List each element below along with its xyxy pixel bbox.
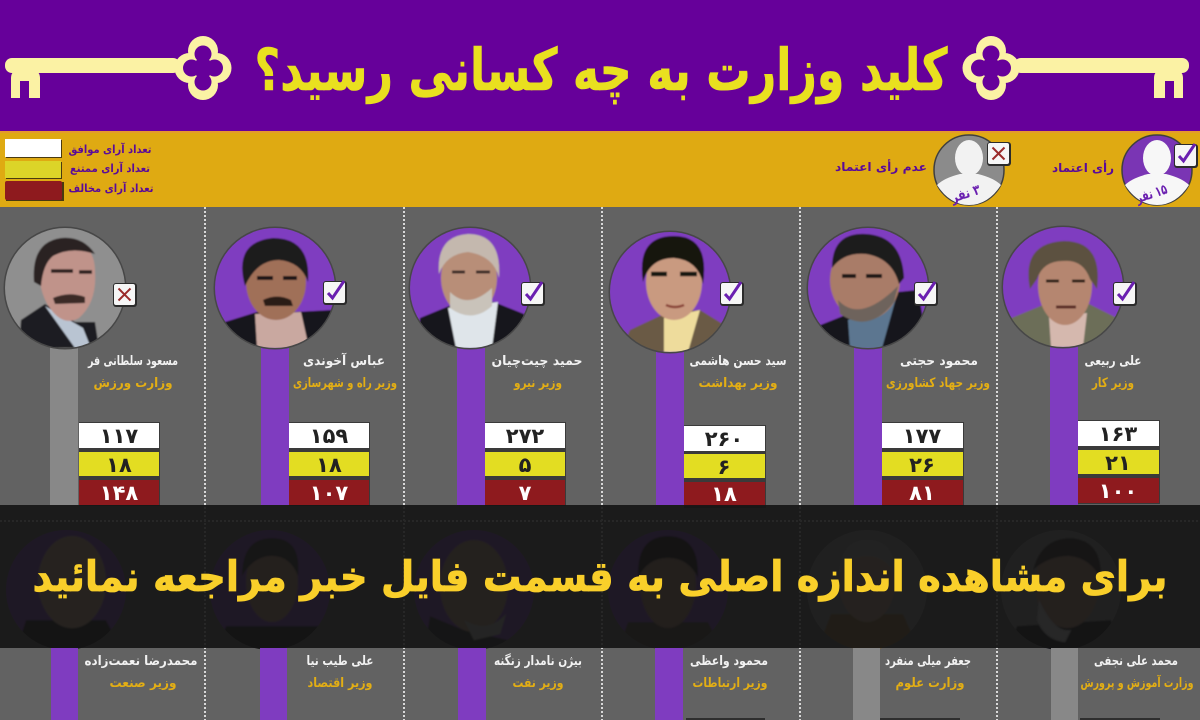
bar — [854, 348, 882, 505]
name: محمود حجتی — [900, 354, 978, 369]
header band — [0, 0, 1200, 131]
status: approved — [323, 281, 347, 305]
votes: ۱۸ — [106, 453, 132, 477]
votes: ۱۸ — [711, 482, 737, 506]
ministry: وزیر راه و شهرسازی — [293, 376, 397, 391]
votes: ۱۸ — [316, 453, 342, 477]
portrait: Bijan Zanganeh — [413, 529, 535, 651]
icon: right key — [962, 36, 1189, 100]
legend: vote colours — [5, 139, 154, 201]
bar — [656, 350, 684, 505]
card: Mahmoud Hojjati — [806, 226, 990, 506]
legend: no confidence, 3 people: عدم رأی اعتماد — [835, 159, 927, 175]
votes — [1078, 420, 1160, 504]
legend: vote colours: تعداد آرای موافق — [68, 142, 152, 156]
votes: ۱۰۷ — [310, 481, 348, 505]
ministry: وزیر نیرو — [513, 376, 562, 391]
bar — [50, 345, 78, 505]
status: approved — [914, 282, 938, 306]
votes — [485, 422, 566, 506]
legend: no confidence, 3 people — [835, 135, 1011, 207]
status: approved — [521, 282, 545, 306]
portrait — [408, 226, 532, 350]
name: سید حسن هاشمی — [690, 354, 786, 369]
portrait: Mahmoud Vaezi — [607, 529, 729, 651]
card text: Tayebnia: علی طیب نیا — [306, 654, 374, 669]
card text: Najafi: محمد علی نجفی — [1094, 654, 1178, 669]
column separators — [205, 207, 997, 720]
legend: no confidence, 3 people: ۳ نفر — [948, 182, 983, 207]
votes: ۲۶۰ — [705, 427, 743, 451]
portrait — [608, 230, 732, 354]
votes: ۵ — [519, 453, 532, 477]
votes: ۱۱۷ — [100, 424, 138, 448]
name: مسعود سلطانی فر — [87, 354, 178, 369]
votes: ۱۶۳ — [1099, 422, 1137, 446]
legend: vote colours: تعداد آرای مخالف — [68, 181, 154, 195]
portrait: Mohammad Ali Najafi — [1036, 558, 1098, 650]
votes: ۲۷۲ — [506, 424, 544, 448]
portrait: Mohammad Reza Nematzadeh — [5, 529, 127, 651]
bottom row bars — [51, 648, 1078, 720]
votes: ۶ — [718, 455, 730, 479]
votes: ۸۱ — [909, 481, 935, 505]
bar — [261, 348, 289, 505]
row divider — [0, 520, 1200, 522]
name: علی ربیعی — [1084, 354, 1142, 369]
card text: Tayebnia: وزیر اقتصاد — [308, 676, 372, 691]
votes: ۱۵۹ — [310, 424, 348, 448]
portrait: Ali Tayebnia — [209, 529, 331, 651]
bar — [1050, 345, 1078, 505]
name: عباس آخوندی — [303, 352, 385, 369]
portrait — [1002, 226, 1124, 348]
ministry: وزیر جهاد کشاورزی — [886, 376, 990, 391]
legend: vote colours: تعداد آرای ممتنع — [70, 161, 150, 175]
portrait: Jafar Milimonfared — [840, 556, 894, 648]
votes: ۱۴۸ — [100, 481, 138, 505]
legend: vote of confidence, 15 people: ۱۵ نفر — [1133, 182, 1170, 207]
portrait — [806, 226, 930, 350]
card text: Zanganeh: بیژن نامدار زنگنه — [494, 653, 582, 669]
status: approved — [1113, 282, 1137, 306]
icon: left key — [5, 36, 232, 100]
card text: Nematzadeh: محمدرضا نعمت‌زاده — [84, 654, 198, 669]
name: حمید چیت‌چیان — [492, 354, 582, 369]
vote box tops at bottom edge — [686, 718, 1160, 720]
card text: Zanganeh — [494, 653, 582, 691]
card text: Milimonfared — [885, 654, 971, 691]
votes: ۲۶ — [909, 453, 935, 477]
card text: Vaezi: محمود واعظی — [690, 654, 768, 669]
votes — [79, 422, 160, 506]
card text: Vaezi — [690, 654, 768, 691]
card text: Tayebnia — [306, 654, 374, 691]
legend band — [0, 131, 1200, 207]
legend: vote of confidence, 15 people — [1052, 135, 1198, 207]
ministry: وزیر کار — [1091, 376, 1134, 391]
card: Masoud Soltanifar — [4, 226, 178, 506]
status: approved — [720, 282, 744, 306]
votes: ۲۱ — [1105, 451, 1131, 475]
ministry: وزارت ورزش — [94, 376, 172, 391]
legend: vote of confidence, 15 people: رأی اعتماد — [1052, 160, 1114, 175]
card: Seyed Hassan Hashemi — [608, 230, 786, 508]
status: rejected — [113, 283, 137, 307]
card text: Milimonfared: جعفر میلی منفرد — [885, 654, 971, 669]
card: Abbas Akhoundi — [214, 226, 397, 506]
votes — [289, 422, 370, 506]
card: Ali Rabiei — [1002, 226, 1160, 505]
card text: Nematzadeh: وزیر صنعت — [110, 676, 176, 691]
votes: ۷ — [519, 481, 532, 505]
bar — [457, 348, 485, 505]
bottom row names and ministries — [84, 653, 1194, 691]
votes — [882, 422, 964, 506]
card text: Vaezi: وزیر ارتباطات — [692, 676, 768, 691]
card text: Zanganeh: وزیر نفت — [512, 676, 564, 691]
votes: ۱۰۰ — [1099, 479, 1137, 503]
title: کلید وزارت به چه کسانی رسید؟ — [254, 36, 948, 105]
votes: ۱۷۷ — [903, 424, 941, 448]
ministry: وزیر بهداشت — [698, 376, 778, 391]
dark overlay banner — [0, 505, 1200, 648]
card text: Najafi — [1080, 654, 1194, 691]
card text: Nematzadeh — [84, 654, 198, 691]
card: Hamid Chitchian — [408, 226, 582, 506]
votes — [684, 425, 766, 508]
portrait — [4, 226, 126, 350]
card text: Milimonfared: وزارت علوم — [896, 676, 964, 691]
bottom portraits — [5, 529, 1122, 651]
portrait — [214, 226, 336, 350]
